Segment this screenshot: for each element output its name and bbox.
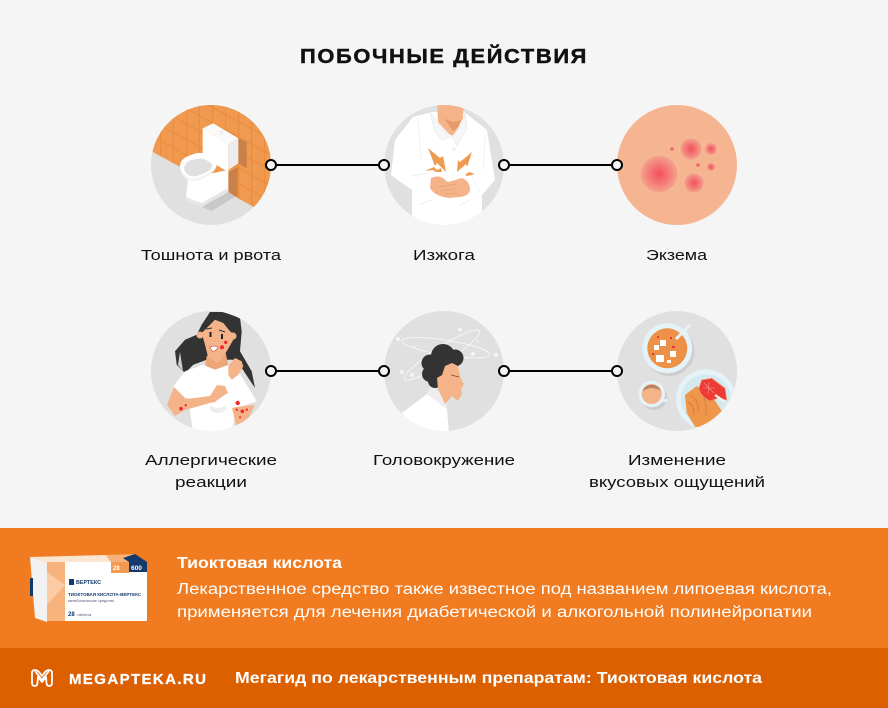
drug name: Тиоктовая кислота (177, 555, 342, 572)
icon: dizzy man profile (384, 311, 504, 437)
drug box: ВЕРТЕКС (76, 580, 101, 586)
drug box: 28 (113, 566, 120, 572)
label: taste change: вкусовых ощущений (589, 474, 765, 491)
label: allergic reactions (145, 452, 277, 491)
brand name: MEGAPTEKA.RU (69, 671, 206, 688)
panel: drug info (0, 528, 888, 648)
drug box: 600 (131, 565, 142, 572)
drug description: применяется для лечения диабетической и алкогольной полинейропатии (177, 604, 812, 621)
icon: woman with allergic reaction (151, 311, 271, 435)
drug description: Лекарственное средство также известное под названием липоевая кислота, (177, 581, 832, 598)
icon: logo (32, 670, 52, 686)
label: dizziness: Головокружение (373, 452, 515, 469)
drug box: метаболическое средство (68, 599, 114, 603)
icon: heartburn, man holding stomach (384, 100, 504, 232)
label: allergic reactions: реакции (175, 474, 247, 491)
icon: skin eczema (617, 105, 737, 225)
footer bar (0, 648, 888, 708)
icon: food plates (617, 311, 737, 431)
label: allergic reactions: Аллергические (145, 452, 277, 469)
label: taste change (589, 452, 765, 491)
connector: bottom row right (499, 366, 622, 376)
drug description (177, 581, 832, 621)
drug box: таблеток (77, 613, 92, 617)
label: taste change: Изменение (628, 452, 726, 469)
drug box: 28 (68, 612, 75, 618)
drug box (30, 554, 147, 622)
label: eczema: Экзема (646, 247, 708, 264)
drug box: ТИОКТОВАЯ КИСЛОТА-ВЕРТЕКС (68, 592, 142, 597)
connector: top row left (266, 160, 389, 170)
label: nausea: Тошнота и рвота (141, 247, 282, 264)
connector: top row right (499, 160, 622, 170)
title: ПОБОЧНЫЕ ДЕЙСТВИЯ (300, 44, 588, 68)
footer link text: Мегагид по лекарственным препаратам: Тиоктовая кислота (235, 670, 762, 687)
label: heartburn: Изжога (413, 247, 476, 264)
icon: toilet, nausea and vomiting (151, 105, 271, 225)
connector: bottom row left (266, 366, 389, 376)
